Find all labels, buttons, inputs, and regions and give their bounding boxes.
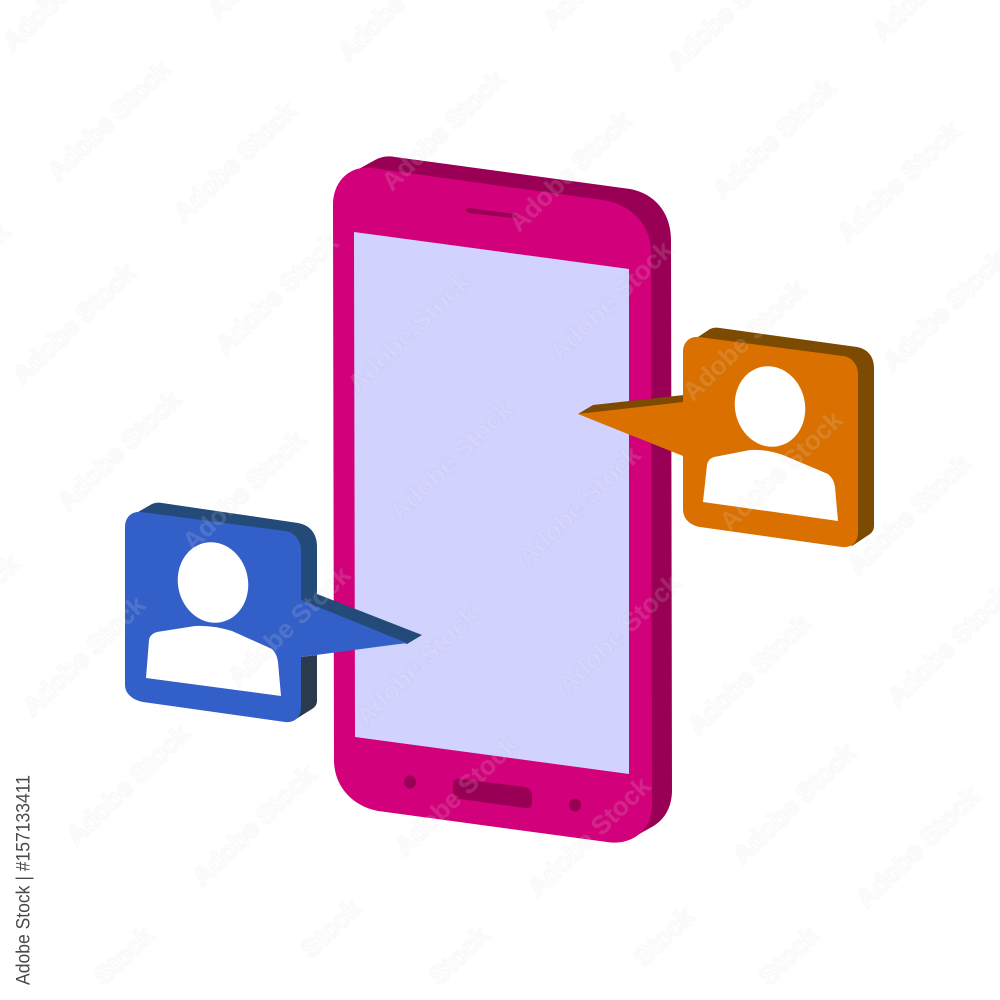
blue bubble lower depth (290, 655, 317, 719)
orange bubble body (578, 337, 858, 547)
watermark pattern: Adobe Stock (713, 404, 849, 537)
watermark pattern: Adobe Stock (51, 384, 187, 517)
blue bubble body (125, 512, 407, 722)
watermark pattern: Adobe Stock (676, 274, 812, 407)
orange bubble person head (727, 360, 813, 453)
watermark pattern: Adobe Stock (41, 54, 177, 187)
watermark pattern: Adobe Stock (383, 394, 519, 527)
watermark pattern: Stock (88, 920, 160, 991)
phone front body (333, 168, 652, 843)
watermark pattern: Adobe Stock (176, 424, 312, 557)
watermark pattern: Adobe Stock (681, 608, 817, 741)
phone screen (354, 232, 629, 774)
orange chat bubble (578, 328, 874, 547)
watermark pattern: Adobe Stock (16, 589, 152, 722)
blue bubble person head (170, 536, 256, 629)
blue bubble person body (146, 626, 281, 696)
blue bubble upper depth (138, 503, 422, 644)
phone side depth (357, 156, 672, 838)
watermark pattern: Stock (295, 893, 367, 964)
phone home button (453, 779, 532, 808)
watermark pattern: Adobe Stock (543, 234, 679, 367)
watermark pattern: Adobe Stock (375, 64, 511, 197)
watermark pattern: Stock (753, 920, 825, 991)
phone speaker (466, 208, 517, 218)
watermark pattern: Adobe Stock (502, 105, 638, 238)
smartphone (333, 156, 672, 843)
watermark pattern: Adobe Stock (209, 227, 345, 360)
watermark pattern: Adobe Stock (831, 115, 967, 248)
watermark pattern: Adobe Stock (388, 729, 524, 862)
watermark pattern: Adobe Stock (726, 737, 862, 870)
phone left dot (404, 776, 416, 788)
stock image credit: Adobe Stock | #157133411 (14, 775, 34, 985)
watermark pattern: Adobe Stock (850, 781, 986, 914)
watermark pattern: Stock (423, 920, 495, 991)
watermark pattern: Adobe Stock (60, 718, 196, 851)
blue chat bubble (125, 503, 422, 722)
orange bubble person body (703, 450, 838, 521)
watermark pattern: Adobe Stock (186, 759, 322, 892)
phone right dot (569, 798, 581, 812)
watermark pattern: Adobe Stock (511, 439, 647, 572)
orange pointer depth (578, 395, 684, 414)
watermark pattern: Stock (628, 901, 700, 972)
watermark pattern: Adobe Stock (551, 567, 687, 700)
orange bubble depth (698, 328, 874, 546)
watermark pattern: Adobe Stock (6, 257, 142, 390)
watermark pattern: Adobe Stock (221, 559, 357, 692)
watermark pattern: Adobe Stock (167, 95, 303, 228)
watermark pattern: Adobe Stock (349, 599, 485, 732)
watermark pattern: Adobe Stock (706, 72, 842, 205)
watermark pattern: Adobe Stock (341, 266, 477, 399)
watermark pattern: Adobe Stock (841, 448, 977, 581)
watermark pattern: Adobe Stock (521, 770, 657, 903)
